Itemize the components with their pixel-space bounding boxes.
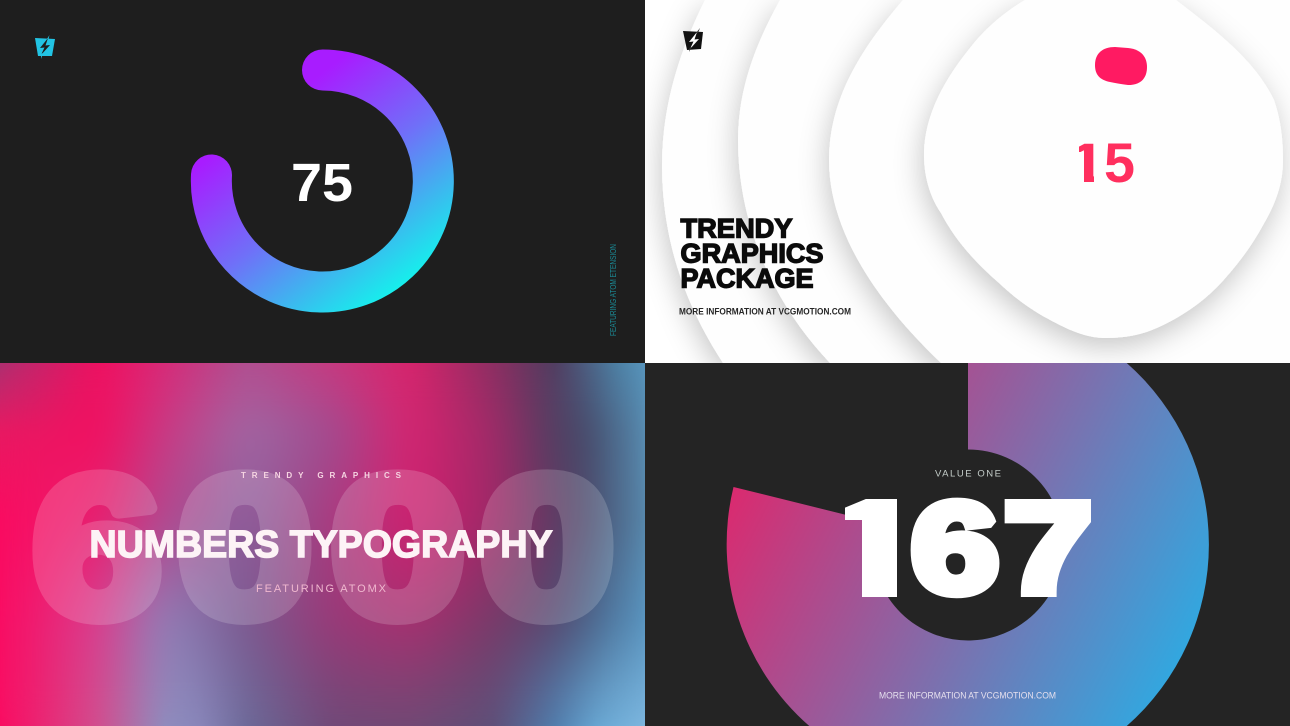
panel: dark ring counter <box>0 0 645 363</box>
translucent 6000 numerals: 0 <box>330 436 466 659</box>
ring progress chart <box>211 70 433 292</box>
heading: trendy graphics package: TRENDY <box>680 214 792 244</box>
layered blob 2 <box>722 0 830 363</box>
big number 167: 1 <box>820 477 930 620</box>
heading: trendy graphics package <box>680 218 824 288</box>
label: value one: VALUE ONE <box>935 468 1001 480</box>
pink progress dot <box>1095 47 1147 85</box>
big number 167: 7 <box>1004 477 1094 620</box>
translucent 6000 numerals: 0 <box>479 436 615 659</box>
ring sector chart <box>727 363 1209 726</box>
title: numbers typography: NUMBERS TYPOGRAPHY <box>90 524 552 566</box>
layered blob 3 <box>814 0 940 363</box>
eyebrow: trendy graphics: TRENDY GRAPHICS <box>241 471 402 480</box>
info line: MORE INFORMATION AT VCGMOTION.COM <box>879 690 1056 702</box>
panel: dark sector ring with 167 <box>726 363 1209 726</box>
icon: black lightning logo <box>683 28 703 52</box>
vertical caption: FEATURING ATOM ETENSION <box>609 244 618 336</box>
translucent 6000 numerals: 6 <box>32 436 162 659</box>
heading: trendy graphics package: GRAPHICS <box>680 238 824 268</box>
heading: trendy graphics package: PACKAGE <box>680 264 814 294</box>
panel: white layered shapes <box>645 0 1290 363</box>
icon: cyan lightning logo <box>35 35 55 59</box>
big number 167 <box>845 498 1091 598</box>
translucent 6000 numerals <box>32 436 615 659</box>
number 15: 5 <box>1104 131 1135 194</box>
layered blob 4 <box>924 0 1283 338</box>
number 15 <box>1079 144 1134 182</box>
translucent 6000 numerals: 0 <box>177 436 313 659</box>
subtitle: featuring atomx: FEATURING ATOMX <box>256 583 387 595</box>
number 15: 1 <box>1068 131 1106 194</box>
mesh gradient background <box>0 363 645 726</box>
number 75: 75 <box>291 153 353 213</box>
layered blob 1 <box>646 0 723 363</box>
info line: MORE INFORMATION AT VCGMOTION.COM <box>679 306 851 316</box>
panel: gradient numbers typography <box>32 436 615 659</box>
big number 167: 6 <box>911 477 999 620</box>
